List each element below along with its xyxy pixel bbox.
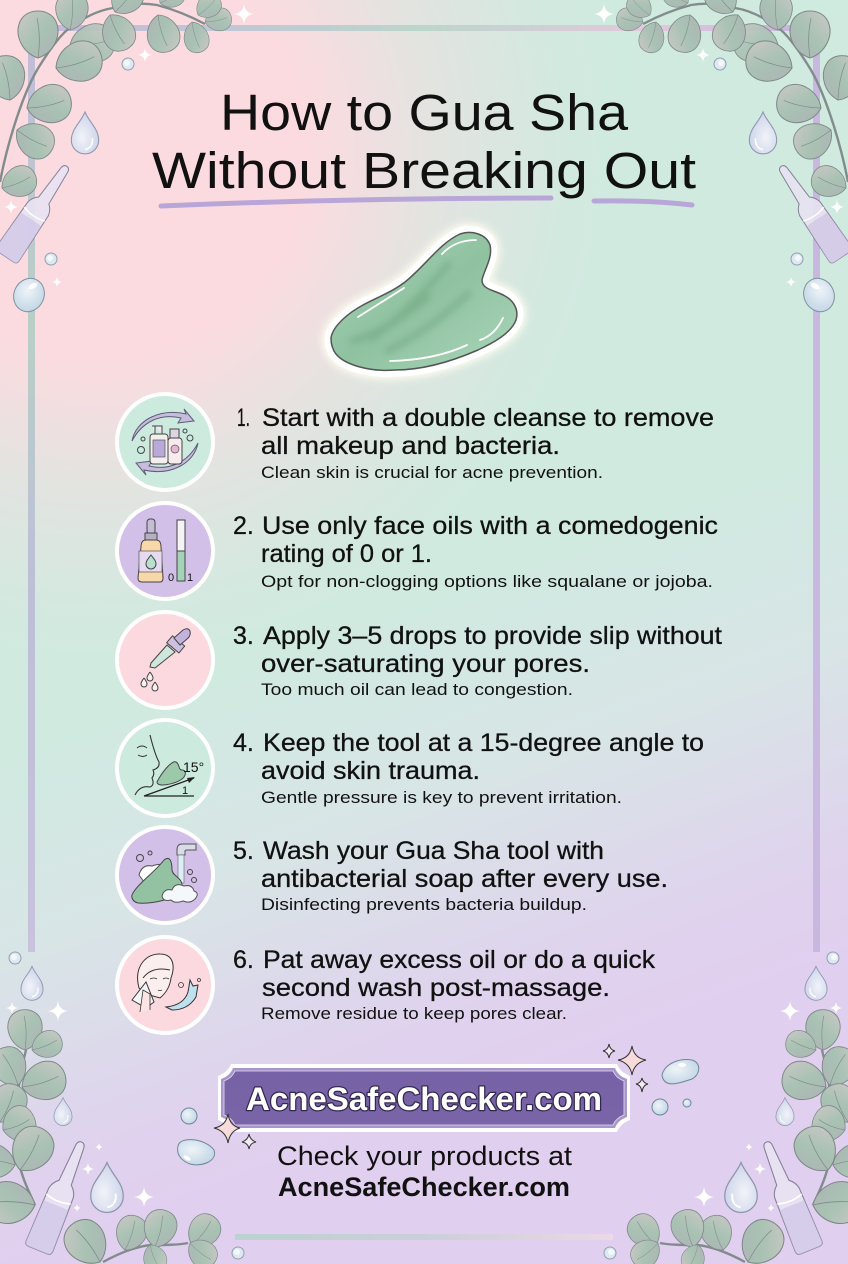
step 1 text: all makeup and bacteria. [261, 432, 560, 460]
step 2 text: rating of 0 or 1. [261, 540, 432, 568]
icon: oil bottle with rating scale [117, 503, 213, 599]
botanical corner: top left [0, 0, 254, 317]
step 5 [117, 827, 668, 923]
step 6 text: second wash post-massage. [262, 974, 610, 1002]
step 6 [117, 937, 656, 1033]
step 5 text: antibacterial soap after every use. [261, 865, 668, 893]
step 3 [117, 612, 722, 708]
step 4 text: 4. [233, 729, 254, 757]
step 4 [117, 720, 704, 816]
call to action: Check your products at [277, 1141, 573, 1171]
sparkles and droplets around banner [178, 1044, 699, 1165]
title underline [161, 198, 692, 206]
step 5 text: 5. [233, 837, 254, 865]
banner text: AcneSafeChecker.com [246, 1081, 602, 1117]
icon: face with 15 degree angle: 15° [183, 759, 204, 775]
step 3 text: over-saturating your pores. [261, 650, 590, 678]
step 5 text: Disinfecting prevents bacteria buildup. [261, 895, 587, 914]
step 3 text: Too much oil can lead to congestion. [261, 680, 573, 699]
step 1 text [237, 404, 714, 482]
title [152, 84, 696, 199]
step 4 text: Keep the tool at a 15-degree angle to [263, 729, 704, 757]
icon: face with 15 degree angle: 1 [182, 785, 188, 797]
icon: oil bottle with rating scale: 0 [168, 572, 174, 584]
website banner [218, 1064, 630, 1132]
botanical corner: top right [594, 0, 848, 317]
step 4 text: avoid skin trauma. [261, 757, 480, 785]
step 2 [117, 503, 718, 599]
step 5 text: Wash your Gua Sha tool with [263, 837, 604, 865]
step 3 text: 3. [233, 622, 254, 650]
icon: oil bottle with rating scale: 1 [187, 572, 193, 584]
step 3 text: Apply 3–5 drops to provide slip without [263, 622, 722, 650]
icon: bottles with cleanse arrows [117, 394, 213, 490]
icon: washing tool under tap [117, 827, 213, 923]
step 1 [117, 394, 714, 490]
botanical corner: bottom left [0, 952, 244, 1264]
step 6 text: 6. [233, 946, 254, 974]
call to action: AcneSafeChecker.com [278, 1172, 570, 1202]
step 4 text [233, 729, 704, 807]
icon: face with 15 degree angle [117, 720, 213, 816]
icon: woman patting face with towel [117, 937, 213, 1033]
step 1 text: Clean skin is crucial for acne prevention. [261, 463, 603, 482]
botanical corner: bottom right [604, 952, 848, 1264]
step 1 text: 1. [237, 404, 250, 432]
step 2 text: Opt for non-clogging options like squalane or jojoba. [261, 572, 713, 591]
step 2 text [233, 512, 718, 591]
call to action [277, 1141, 573, 1202]
step 5 text [233, 837, 668, 914]
step 1 text: Start with a double cleanse to remove [262, 404, 714, 432]
step 6 text: Pat away excess oil or do a quick [263, 946, 656, 974]
step 3 text [233, 622, 722, 699]
title: Without Breaking Out [152, 142, 696, 199]
step 2 text: Use only face oils with a comedogenic [262, 512, 718, 540]
gua sha jade tool [331, 232, 517, 370]
title: How to Gua Sha [220, 84, 629, 141]
step 2 text: 2. [233, 512, 254, 540]
step 4 text: Gentle pressure is key to prevent irritation. [261, 788, 622, 807]
step 6 text [233, 946, 656, 1023]
step 6 text: Remove residue to keep pores clear. [261, 1004, 567, 1023]
icon: dropper [117, 612, 213, 708]
